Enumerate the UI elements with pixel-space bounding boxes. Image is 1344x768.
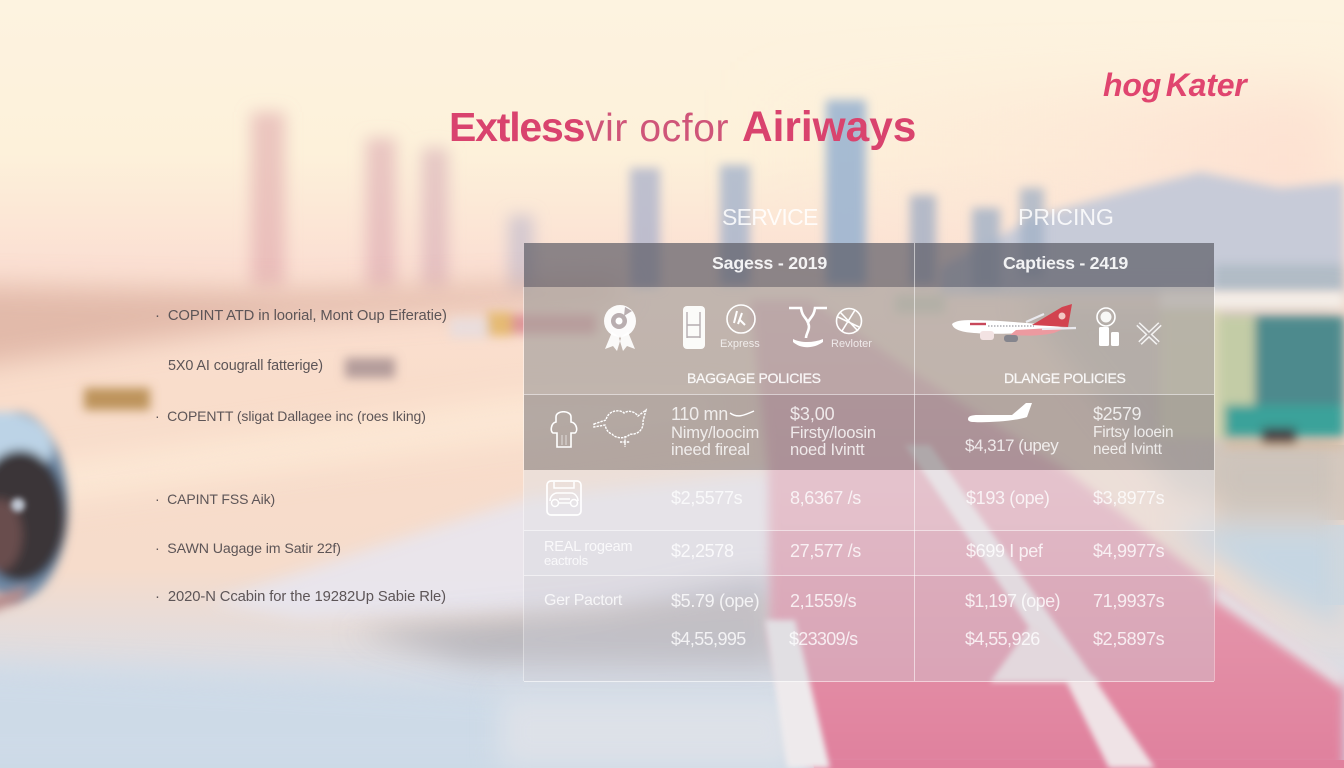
- ground bands: [0, 282, 1344, 768]
- row 5 label: Ger Pactort: [544, 592, 622, 609]
- row 6 values: $4,55,995: [671, 629, 746, 649]
- icon: award ribbon: [604, 305, 636, 351]
- icon: cloud sketch: [593, 408, 648, 447]
- icon: luggage: [683, 306, 705, 349]
- title: vir ocfor: [585, 107, 729, 150]
- row 4 label: [544, 539, 632, 568]
- table header: capriess 2419: Captiess - 2419: [1003, 253, 1128, 273]
- comparison table: $699 I pef: [966, 541, 1043, 561]
- pricing fee values: [1093, 404, 1173, 458]
- row 5 values: $5.79 (ope): [671, 591, 759, 611]
- baggage allowance values: 110 mn: [671, 404, 728, 424]
- comparison table: 71,9937s: [1093, 591, 1164, 611]
- icon: y-shaped support: [789, 306, 827, 348]
- icon: express circle with label: Express: [720, 338, 760, 350]
- icon: person with headset: [1096, 307, 1119, 346]
- baggage fee values: noed Ivintt: [790, 440, 864, 459]
- background vehicles and terminal: [84, 292, 1344, 447]
- pricing fee values: need Ivintt: [1093, 441, 1162, 458]
- baggage allowance values: ineed fireal: [671, 440, 750, 459]
- icon: reflector wheel with label: [831, 308, 872, 350]
- comparison table: $3,8977s: [1093, 488, 1164, 508]
- icon: red and white airplane: [952, 304, 1076, 342]
- comparison table: 27,577 /s: [790, 541, 861, 561]
- icon: bus: [546, 480, 582, 516]
- comparison table: $1,197 (ope): [965, 591, 1060, 611]
- row 4 values: $2,2578: [671, 541, 734, 561]
- comparison table: $2,5897s: [1093, 629, 1164, 649]
- section label: dlange policies: DLANGE POLICIES: [1004, 370, 1126, 386]
- red runway: [750, 300, 1344, 768]
- baggage fee values: [790, 404, 876, 459]
- icon: crossed tools: [1136, 322, 1162, 345]
- list item 3: · COPENTT (sligat Dallagee inc (roes Iking): [155, 408, 426, 424]
- comparison table: $4,55,926: [965, 629, 1040, 649]
- baggage fee values: $3,00: [790, 404, 835, 424]
- row 4 label: REAL rogeam: [544, 539, 632, 555]
- title: [449, 103, 916, 150]
- comparison table: 2,1559/s: [790, 591, 856, 611]
- pricing fee values: $2579: [1093, 404, 1141, 424]
- icon: express circle with label: [720, 304, 760, 350]
- aircraft wing: [210, 470, 790, 618]
- left feature list: [155, 308, 447, 605]
- icon: white airplane: [968, 403, 1032, 422]
- baggage allowance values: [671, 404, 759, 459]
- comparison table: $193 (ope): [966, 488, 1050, 508]
- logo: hog Kater: [1103, 67, 1247, 103]
- comparison table: $4,9977s: [1093, 541, 1164, 561]
- title: Extless: [449, 104, 584, 150]
- row 4 label: eactrols: [544, 553, 588, 568]
- list item 2: 5X0 AI cougrall fatterige): [168, 358, 323, 374]
- section label: baggage policies: BAGGAGE POLICIES: [687, 370, 821, 386]
- pricing value with airplane: $4,317 (upey: [965, 436, 1058, 455]
- baggage allowance values: Nimy/loocim: [671, 423, 759, 442]
- comparison table: 8,6367 /s: [790, 488, 861, 508]
- title: Airiways: [742, 103, 916, 150]
- row 3 values: $2,5577s: [671, 488, 742, 508]
- icon: seat: [550, 411, 578, 448]
- engine at left edge: [0, 412, 68, 600]
- icon: reflector wheel with label: Revloter: [831, 338, 872, 350]
- list item 5: · SAWN Uagage im Satir 22f): [155, 541, 341, 557]
- column heading: pricing: PRICING: [1018, 204, 1114, 230]
- column heading: service: SERVICE: [722, 204, 818, 230]
- list item 4: · CAPINT FSS Aik): [155, 491, 275, 507]
- baggage fee values: Firsty/loosin: [790, 423, 876, 442]
- comparison table: $23309/s: [789, 629, 857, 649]
- pricing fee values: Firtsy looein: [1093, 424, 1173, 441]
- table header: sagess 2019: Sagess - 2019: [712, 253, 827, 273]
- list item 1: · COPINT ATD in loorial, Mont Oup Eiferatie): [155, 308, 447, 324]
- list item 6: · 2020-N Ccabin for the 19282Up Sabie Rle): [155, 589, 446, 605]
